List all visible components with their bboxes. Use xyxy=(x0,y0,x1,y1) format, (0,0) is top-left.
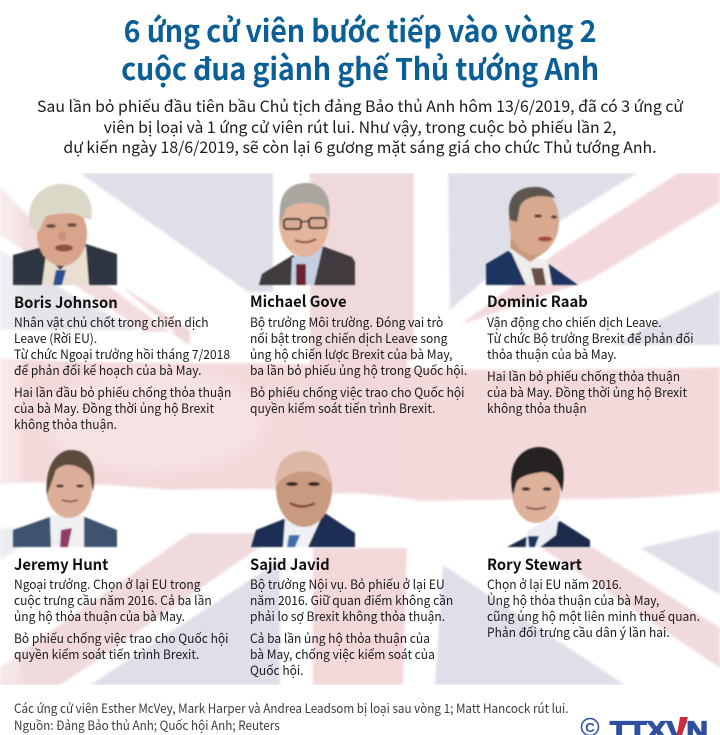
card: Boris Johnson: Hai lần đầu bỏ phiếu chống thỏa thuận xyxy=(14,382,231,401)
card: Jeremy Hunt: quyền kiểm soát tiến trình Brexit. xyxy=(14,644,199,663)
card: Sajid Javid: bà May, chống việc kiểm soát của xyxy=(250,644,435,663)
card: Boris Johnson: để phản đối kế hoạch của bà May. xyxy=(14,360,201,379)
card: Michael Gove: Bộ trưởng Môi trường. Đóng vai trò xyxy=(250,312,443,331)
title: 6 ứng cử viên bước tiếp vào vòng 2 xyxy=(124,7,596,51)
card: Dominic Raab: Dominic Raab xyxy=(487,290,588,312)
card: Michael Gove: nổi bật trong chiến dịch Leave song xyxy=(250,328,447,347)
card: Sajid Javid: Cả ba lần ủng hộ thỏa thuận của xyxy=(250,628,430,647)
card: Michael Gove: ủng hộ chiến lược Brexit của bà May, xyxy=(250,344,452,363)
card: Rory Stewart: Ủng hộ thỏa thuận của bà May, xyxy=(487,590,659,609)
card: Rory Stewart: cũng ủng hộ một liên minh thuế quan. xyxy=(487,606,700,625)
card: Rory Stewart xyxy=(487,553,700,641)
card: Jeremy Hunt xyxy=(14,553,229,663)
card: Sajid Javid: Sajid Javid xyxy=(250,553,330,575)
card: Rory Stewart: Chọn ở lại EU năm 2016. xyxy=(487,574,622,593)
intro text xyxy=(37,94,684,158)
card: Jeremy Hunt: cuộc trưng cầu năm 2016. Cả ba lần xyxy=(14,590,212,609)
card: Boris Johnson xyxy=(14,291,231,433)
card: Boris Johnson: Nhân vật chủ chốt trong chiến dịch xyxy=(14,312,209,331)
card: Sajid Javid: Bộ trưởng Nội vụ. Bỏ phiếu ở lại EU xyxy=(250,574,445,593)
card: Dominic Raab: Hai lần bỏ phiếu chống thỏa thuận xyxy=(487,366,680,385)
card: Dominic Raab xyxy=(487,290,694,417)
card: Rory Stewart: Phản đối trưng cầu dân ý lần hai. xyxy=(487,622,670,641)
logo: TTXVN: C xyxy=(585,720,595,735)
card: Jeremy Hunt: Ngoại trưởng. Chọn ở lại EU trong xyxy=(14,574,201,593)
card: Michael Gove: ba lần bỏ phiếu ủng hộ trong Quốc hội. xyxy=(250,360,467,379)
card: Sajid Javid: Quốc hội. xyxy=(250,660,304,679)
footnote and sources: Nguồn: Đảng Bảo thủ Anh; Quốc hội Anh; Reuters xyxy=(14,715,280,734)
card: Dominic Raab: Từ chức Bộ trưởng Brexit để phản đối xyxy=(487,328,694,347)
card: Boris Johnson: Boris Johnson xyxy=(14,291,118,313)
footnote and sources: Các ứng cử viên Esther McVey, Mark Harper và Andrea Leadsom bị loại sau vòng 1; Matt Hancock rút lui. xyxy=(14,698,568,717)
intro text: viên bị loại và 1 ứng cử viên rút lui. Như vậy, trong cuộc bỏ phiếu lần 2, xyxy=(104,114,616,138)
card: Dominic Raab: Vận động cho chiến dịch Leave. xyxy=(487,312,662,331)
card: Boris Johnson: của bà May. Đồng thời ủng hộ Brexit xyxy=(14,398,214,417)
card: Jeremy Hunt: Bỏ phiếu chống việc trao cho Quốc hội xyxy=(14,628,229,647)
title: cuộc đua giành ghế Thủ tướng Anh xyxy=(121,45,599,89)
card: Michael Gove: quyền kiểm soát tiến trình Brexit. xyxy=(250,398,435,417)
card: Rory Stewart: Rory Stewart xyxy=(487,553,582,575)
card: Boris Johnson: Từ chức Ngoại trưởng hồi tháng 7/2018 xyxy=(14,344,230,363)
title xyxy=(121,7,599,89)
card: Dominic Raab: của bà May. Đồng thời ủng hộ Brexit xyxy=(487,382,687,401)
card: Boris Johnson: không thỏa thuận. xyxy=(14,414,117,433)
footnote and sources xyxy=(14,698,568,734)
card: Jeremy Hunt: ủng hộ thỏa thuận của bà May. xyxy=(14,606,185,625)
card: Sajid Javid: năm 2016. Giữ quan điểm không cần xyxy=(250,590,453,609)
card: Michael Gove xyxy=(250,290,467,417)
card: Sajid Javid xyxy=(250,553,453,679)
background: Union Jack flag xyxy=(0,173,720,685)
intro text: dự kiến ngày 18/6/2019, sẽ còn lại 6 gương mặt sáng giá cho chức Thủ tướng Anh. xyxy=(63,135,657,158)
intro text: Sau lần bỏ phiếu đầu tiên bầu Chủ tịch đảng Bảo thủ Anh hôm 13/6/2019, đã có 3 ứng cử xyxy=(37,94,683,117)
card: Dominic Raab: thỏa thuận của bà May. xyxy=(487,344,617,363)
card: Michael Gove: Bỏ phiếu chống việc trao cho Quốc hội xyxy=(250,382,465,401)
card: Boris Johnson: Leave (Rời EU). xyxy=(14,328,97,347)
card: Sajid Javid: phải lo sợ Brexit không thỏa thuận. xyxy=(250,606,445,625)
card: Michael Gove: Michael Gove xyxy=(250,290,347,312)
card: Jeremy Hunt: Jeremy Hunt xyxy=(14,553,108,575)
card: Dominic Raab: không thỏa thuận xyxy=(487,398,587,417)
